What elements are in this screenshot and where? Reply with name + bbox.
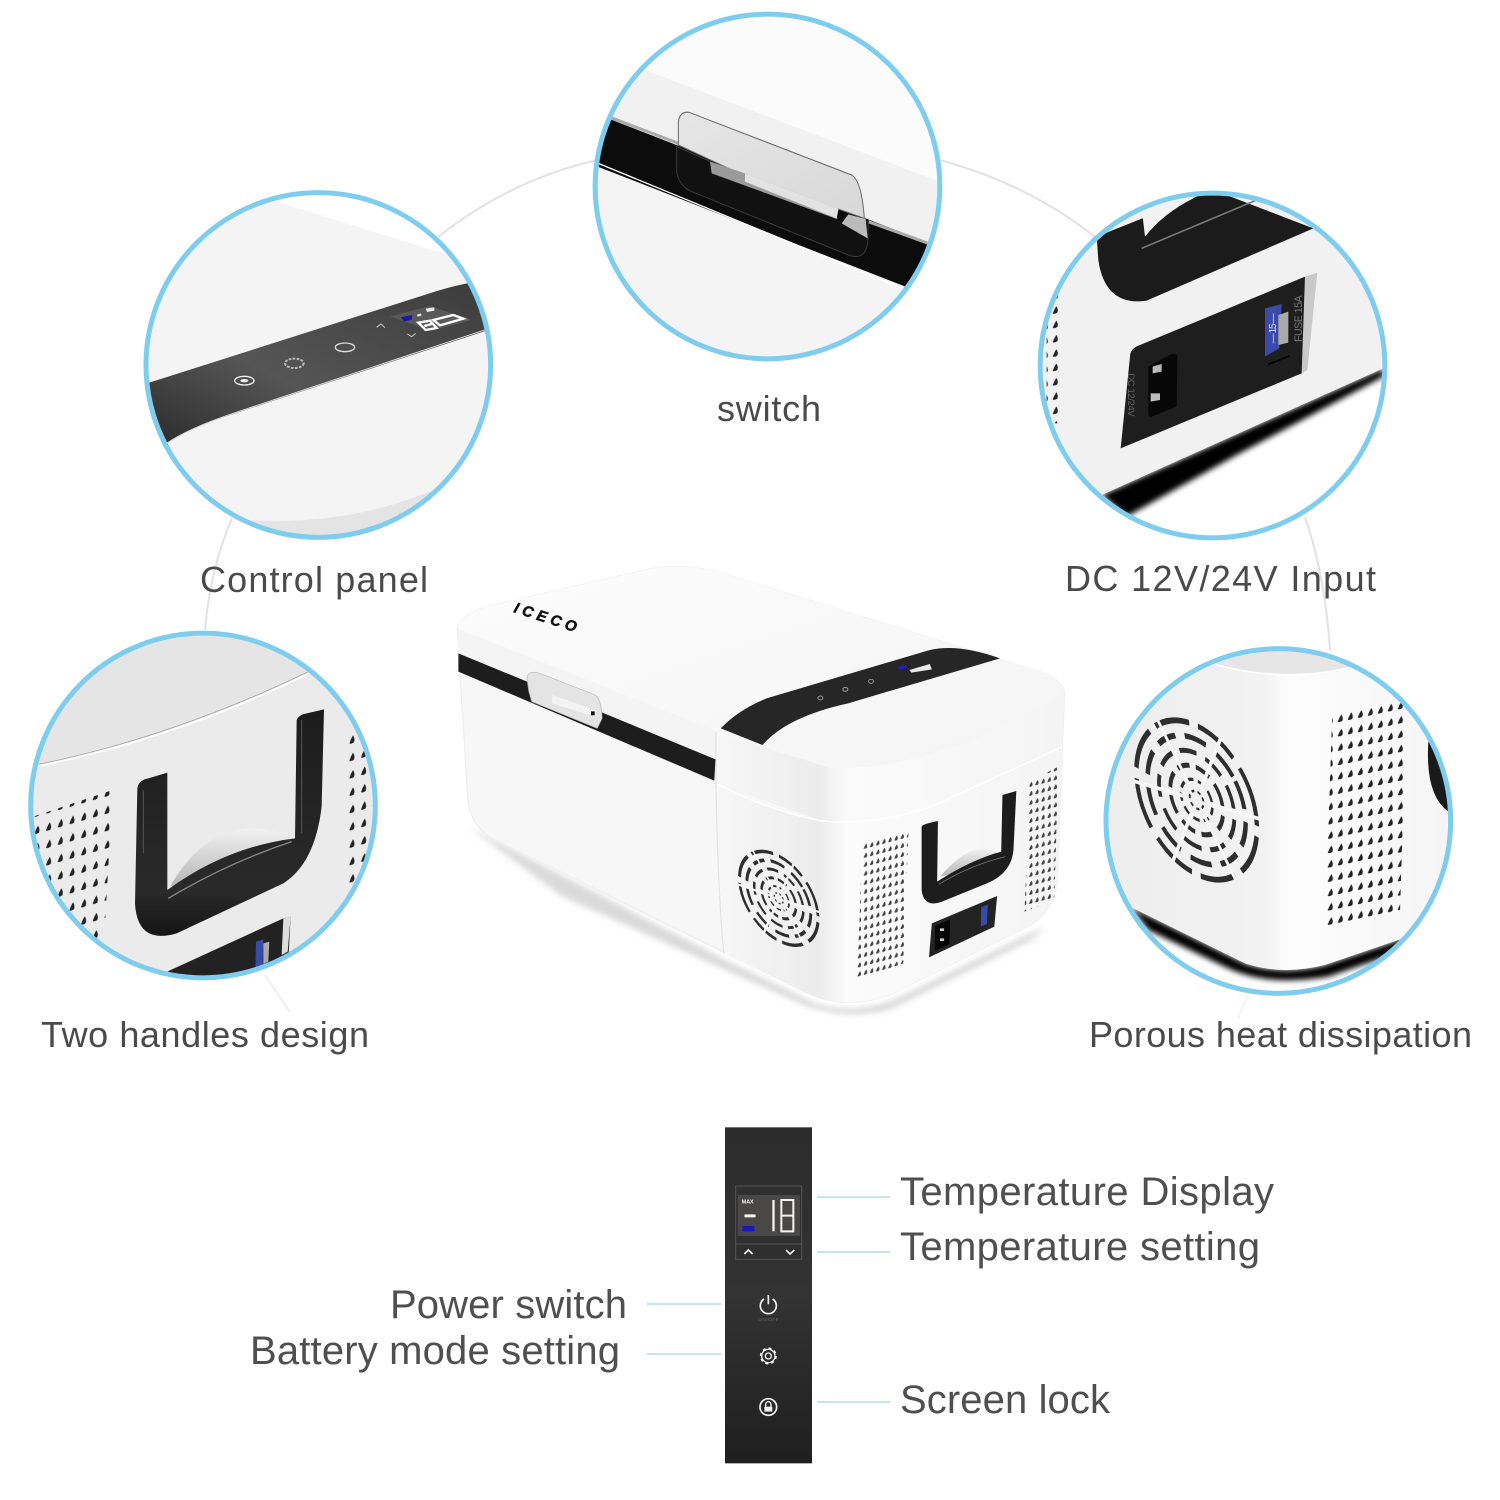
circle: porous heat dissipation detail [1104,646,1454,996]
panel labels: Battery mode setting [250,1329,620,1373]
display window [736,1186,802,1259]
feature labels: switch [717,388,821,429]
port panel: DC 12/24V [1126,373,1136,417]
circle: switch detail [585,5,950,370]
switch [527,672,602,728]
control panel diagram [725,1127,812,1463]
lower right face [716,747,1062,1002]
ground shadow [469,827,1044,1014]
lid top [457,566,1064,769]
power icon [760,1295,776,1314]
handle dome [170,843,266,886]
rear port sliver [168,916,291,976]
circle: control panel detail [144,190,494,540]
circle: DC input detail [1038,190,1388,540]
panel labels: Power switch [390,1283,627,1327]
body silhouette [457,566,1064,1002]
control strip [721,648,1000,745]
port panel: — 15 — [1268,313,1279,343]
feature labels: DC 12V/24V Input [1065,558,1376,599]
silver switch plate [678,112,868,238]
panel labels: Screen lock [900,1378,1111,1422]
gear icon [761,1348,776,1364]
body [1108,664,1448,970]
dark control strip [145,283,488,445]
feature labels [41,388,1472,1055]
panel labels [250,1170,1274,1422]
black seal strip [585,113,938,292]
ground shadow [1130,907,1415,980]
body [1042,196,1382,494]
panel labels: Temperature setting [900,1225,1260,1269]
black seal strip [458,653,716,781]
feature labels: Porous heat dissipation [1089,1014,1472,1055]
cooling holes [1046,295,1058,424]
handle [922,791,1016,903]
leader lines [647,1197,890,1402]
circle: two handles detail [28,630,378,980]
fan grille [722,840,835,957]
feature labels: Two handles design [41,1014,369,1055]
fan grille [1134,717,1260,883]
port panel [1121,273,1317,448]
panel labels: Temperature Display [900,1170,1274,1214]
product: portable fridge [457,566,1064,1014]
connector arcs [205,160,1330,1018]
U handle [135,709,324,936]
feature labels: Control panel [200,559,428,600]
lid left band [457,628,718,759]
handle edge [1428,742,1448,812]
display window: MAX [742,1199,754,1205]
ICECO logo: ICECO [512,600,579,636]
lid front right face [716,693,1064,822]
bottom shadow [1102,368,1383,517]
recess [677,147,868,257]
vents [857,830,909,980]
black handle [1097,187,1313,301]
mini display [390,306,472,331]
on/off caption: ON/OFF [758,1317,779,1323]
perforations [33,790,113,942]
perforated vent [1328,703,1404,926]
port panel [929,896,997,957]
port panel: FUSE 15A [1293,294,1305,342]
lock icon [760,1399,777,1415]
